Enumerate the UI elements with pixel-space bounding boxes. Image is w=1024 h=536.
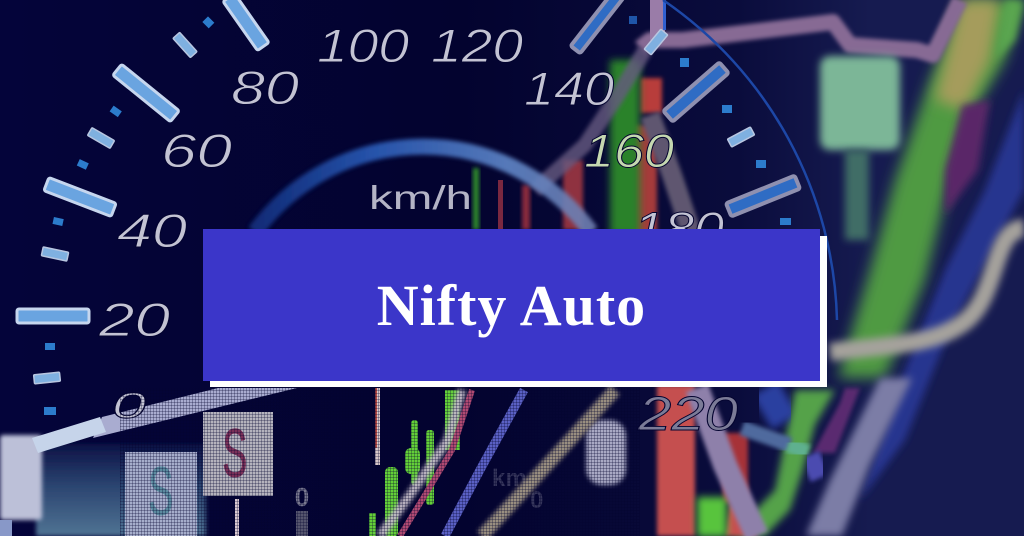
speed numbers: 80	[231, 61, 299, 114]
screen dot grid	[120, 388, 640, 536]
speed numbers: 60	[161, 124, 232, 177]
speed numbers: 160	[584, 124, 674, 177]
speed numbers: 100	[317, 19, 409, 72]
speed numbers: 140	[524, 62, 614, 115]
speed ticks	[17, 0, 800, 415]
lower chart candles and trend lines	[369, 390, 615, 536]
heading: Nifty Auto	[377, 273, 646, 338]
stock chart: candles below title card	[586, 385, 820, 536]
speed numbers: 180	[634, 202, 724, 255]
lower display area: 0	[530, 487, 543, 514]
needle	[32, 388, 297, 453]
stock chart: candles above title card	[473, 0, 692, 235]
arc around km/h	[255, 147, 591, 232]
lower display area: km	[492, 465, 527, 492]
unit label km/h: km/h	[369, 179, 472, 216]
lower display area: S	[148, 455, 174, 536]
speed numbers: 0	[112, 385, 146, 426]
corner panel: lower left	[0, 435, 206, 536]
speed numbers: 120	[431, 19, 523, 72]
speed numbers: 40	[117, 204, 187, 257]
speed numbers	[98, 19, 738, 441]
lower display area	[125, 388, 543, 536]
outer gauge ring	[663, 0, 837, 320]
lower display area: 0	[295, 482, 309, 512]
speed numbers: 220	[637, 388, 738, 441]
title card shadow	[210, 236, 827, 387]
speed numbers: 20	[98, 293, 170, 346]
lower display area: S	[222, 417, 248, 499]
title card	[203, 229, 820, 381]
stock chart: blurred right side	[640, 0, 1024, 536]
